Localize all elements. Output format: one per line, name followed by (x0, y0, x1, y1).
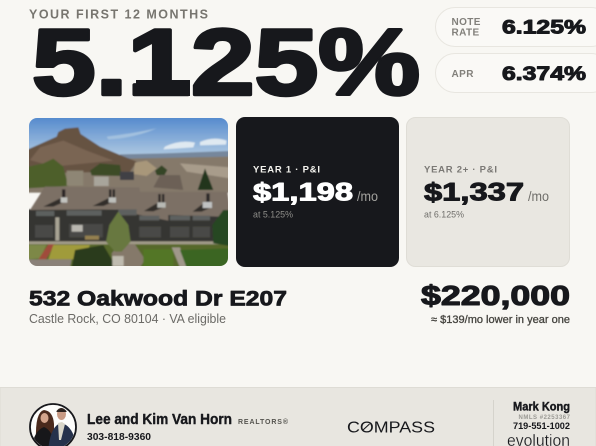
pill: note rate: NOTE (452, 17, 481, 28)
card: year 1 payment: YEAR 1 · P&I (253, 164, 320, 176)
compass logo: COMPASS (347, 420, 435, 436)
card: year 1 payment (236, 117, 399, 267)
pill: APR: APR (452, 69, 474, 80)
property photo (27, 115, 230, 268)
card: year 2+ payment: YEAR 2+ · P&I (424, 164, 497, 176)
card: year 2+ payment (406, 118, 570, 266)
card: year 2+ payment: $1,337 (424, 178, 524, 206)
footer band (0, 388, 596, 446)
lender contact: Mark Kong (513, 402, 570, 414)
pill: APR (436, 54, 596, 92)
pill: APR: 6.374% (502, 63, 586, 85)
pill: note rate: RATE (452, 28, 480, 38)
lender contact (494, 400, 571, 446)
pill: note rate (436, 8, 596, 46)
card: year 1 payment: at 5.125% (253, 210, 294, 220)
eyebrow: your first 12 months: YOUR FIRST 12 MONTHS (29, 8, 208, 22)
agent names: Lee and Kim Van Horn (87, 411, 232, 428)
lender contact: NMLS #2253367 (518, 415, 571, 421)
address: 532 Oakwood Dr E207 (29, 286, 287, 310)
pill: note rate: 6.125% (502, 16, 586, 38)
savings note: ≈ $139/mo lower in year one (431, 314, 570, 326)
location and eligibility: Castle Rock, CO 80104 · VA eligible (29, 312, 226, 326)
agent phone: 303-818-9360 (87, 431, 151, 443)
hero rate: 5.125% (32, 10, 420, 115)
card: year 1 payment: /mo (357, 189, 378, 204)
card: year 2+ payment: /mo (528, 189, 549, 204)
card: year 2+ payment: at 6.125% (424, 210, 465, 220)
price: $220,000 (421, 280, 570, 311)
agent avatar (30, 404, 77, 446)
lender contact: 719-551-1002 (513, 421, 570, 432)
realtors label: REALTORS® (238, 418, 289, 426)
card: year 1 payment: $1,198 (253, 178, 353, 206)
